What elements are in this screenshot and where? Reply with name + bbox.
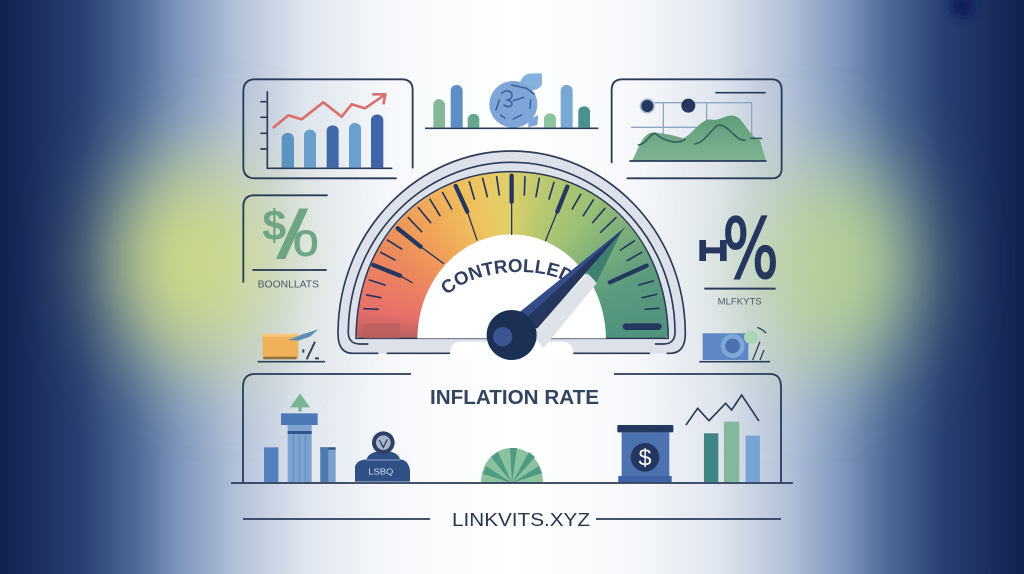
baseline	[231, 482, 793, 484]
panel: bars and trend line chart	[243, 79, 413, 178]
percent sign: %	[723, 202, 779, 297]
icon: green fan	[481, 448, 543, 483]
label BOONLLATS: BOONLLATS	[258, 279, 319, 290]
gauge colour band	[356, 172, 668, 338]
gauge bezel	[338, 151, 685, 358]
icon: crate and percent	[258, 329, 325, 362]
label MLFKYTS: MLFKYTS	[718, 296, 762, 306]
chart: bars with zigzag line	[686, 395, 760, 482]
base label: LSBQ	[368, 467, 393, 476]
gauge label CONTROLLED: CONTROLLED	[442, 259, 571, 292]
percent slash and o: /	[276, 198, 309, 274]
needle hub	[487, 310, 537, 360]
plus sign	[699, 240, 727, 261]
icon: banknote and percent	[699, 327, 770, 362]
panel: dollar percent stat	[243, 195, 328, 290]
panel: dollar percent stat: o	[293, 213, 319, 265]
footer text: LINKVITS.XYZ	[452, 509, 590, 530]
icon: dollar bank box	[617, 425, 673, 482]
panel outline: bottom	[243, 374, 781, 483]
icon: clock on base	[355, 431, 410, 482]
heading: inflation rate: INFLATION RATE	[430, 386, 599, 409]
icon: dollar bank box: $	[638, 445, 651, 471]
panel: plus percent stat	[699, 202, 779, 306]
icon: column with up arrow	[264, 393, 336, 482]
panel: top centre bars and globe	[425, 73, 598, 128]
gauge ticks	[364, 176, 659, 327]
panel: area chart	[612, 79, 782, 178]
gauge outline and hub area	[356, 172, 668, 338]
needle	[507, 227, 626, 328]
footer rule right	[596, 518, 781, 520]
needle shadow	[530, 273, 597, 348]
dollar sign: $	[262, 202, 286, 250]
footer rule left	[243, 518, 430, 520]
